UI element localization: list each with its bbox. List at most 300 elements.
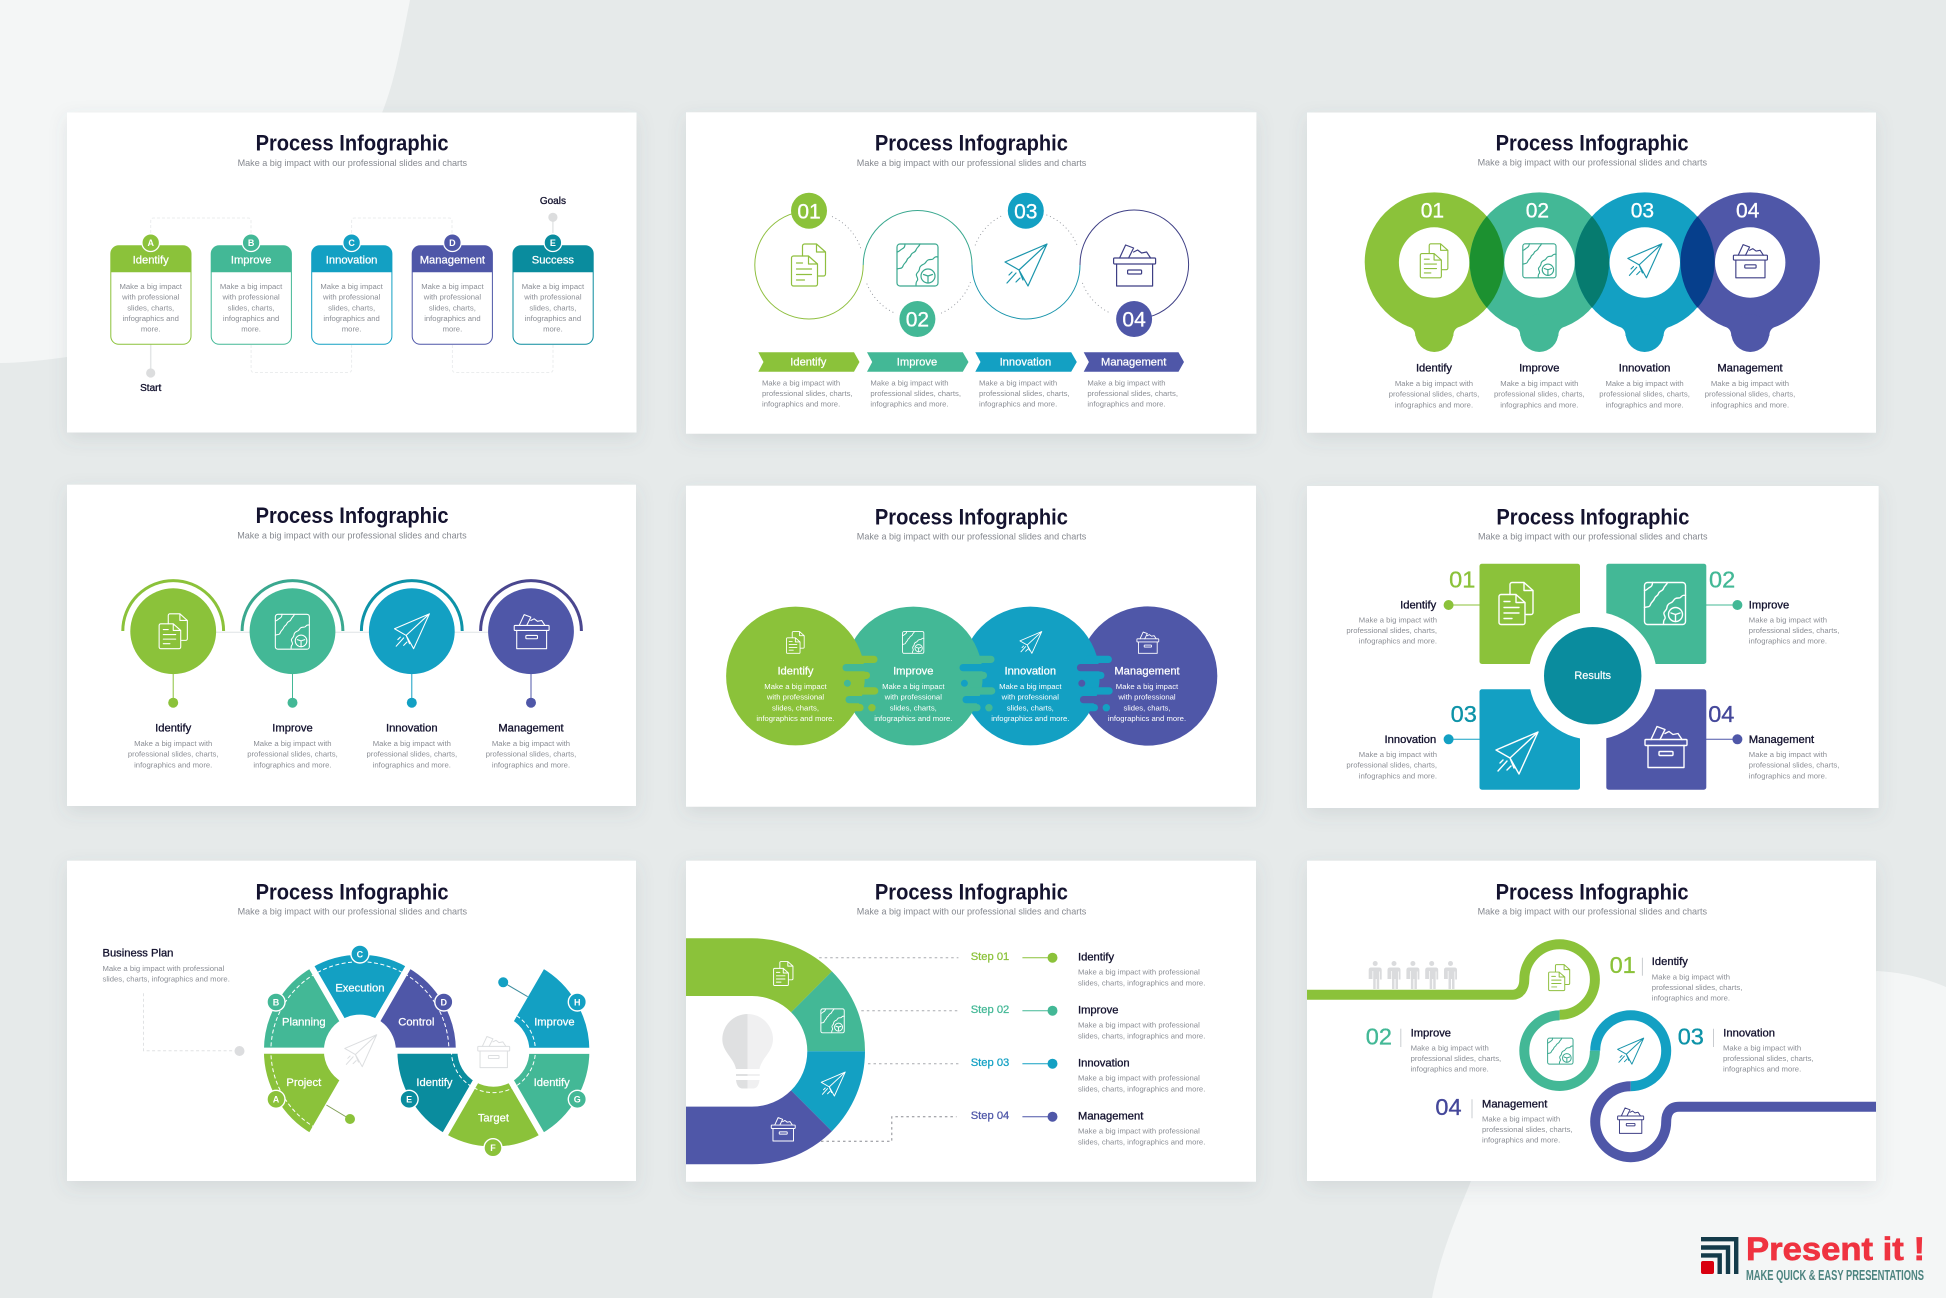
card: identify: slides, charts, bbox=[127, 303, 174, 312]
numbers bbox=[1449, 567, 1735, 727]
pin: 01 green bbox=[1365, 192, 1504, 352]
item 03: professional slides, charts, bbox=[1723, 1054, 1814, 1063]
step 4: management bbox=[481, 581, 581, 769]
step 03 row: Innovation bbox=[1078, 1057, 1130, 1069]
step 4: management: Make a big impact with bbox=[492, 739, 570, 748]
item 01: professional slides, charts, bbox=[1652, 983, 1742, 992]
interlock bars 1-2 bbox=[842, 656, 878, 711]
numbers: 02 bbox=[1709, 567, 1735, 593]
title: Process Infographic bbox=[256, 503, 449, 528]
text: management: slides, charts, bbox=[1124, 703, 1170, 712]
results circle: Results bbox=[1574, 670, 1612, 682]
text: identify: Identify bbox=[1400, 599, 1437, 611]
pin: 04 indigo bbox=[1681, 192, 1820, 352]
segment labels: Identify bbox=[534, 1077, 570, 1089]
text: management: infographics and more. bbox=[1749, 771, 1827, 780]
card: identify: with professional bbox=[121, 293, 180, 302]
badge 02 bbox=[899, 301, 935, 337]
numbers bbox=[1421, 200, 1760, 223]
slide background bbox=[1307, 112, 1876, 433]
item 03: Innovation bbox=[1723, 1027, 1775, 1039]
text: improve: Make a big impact with bbox=[1749, 615, 1827, 624]
card: identify: Identify bbox=[133, 255, 169, 267]
step: identify: Identify bbox=[790, 356, 827, 368]
text: management bbox=[1705, 363, 1795, 409]
item 04: infographics and more. bbox=[1482, 1136, 1560, 1145]
card: success: Make a big impact bbox=[522, 282, 585, 291]
quadrant 04 bbox=[1606, 689, 1706, 790]
card: success: slides, charts, bbox=[529, 303, 576, 312]
step: improve: infographics and more. bbox=[870, 400, 949, 409]
text: management: infographics and more. bbox=[1711, 400, 1789, 409]
goals marker: Goals bbox=[540, 196, 566, 207]
item 02: infographics and more. bbox=[1411, 1065, 1489, 1074]
business plan text: Business Plan bbox=[102, 947, 173, 959]
icon: box bbox=[1733, 245, 1767, 278]
business plan text: Make a big impact with professional bbox=[102, 964, 225, 973]
item 03: Make a big impact with bbox=[1723, 1043, 1801, 1052]
icon: map bbox=[1644, 582, 1686, 624]
step 02 row: Make a big impact with professional bbox=[1078, 1021, 1200, 1030]
item 02: 02 bbox=[1366, 1023, 1392, 1049]
step 2: improve bbox=[242, 581, 343, 769]
step: management: professional slides, charts, bbox=[1087, 389, 1178, 398]
card: management: infographics and bbox=[424, 314, 481, 323]
step 01 row: Step 01 bbox=[971, 951, 1009, 963]
step 02 row bbox=[971, 1004, 1205, 1040]
white cut-out ring bbox=[1529, 612, 1657, 740]
item 04: professional slides, charts, bbox=[1482, 1125, 1573, 1134]
item 04: Management bbox=[1482, 1098, 1548, 1110]
subtitle: Make a big impact with our professional slides and charts bbox=[857, 530, 1087, 541]
panel: horseshoe steps bbox=[686, 861, 1256, 1182]
text: management: Management bbox=[1749, 734, 1815, 746]
step 3: innovation: Innovation bbox=[386, 723, 438, 735]
item 03: infographics and more. bbox=[1723, 1065, 1801, 1074]
pin: 02 teal bbox=[1470, 192, 1609, 352]
text: identify: infographics and more. bbox=[1359, 637, 1437, 646]
item 01: 01 bbox=[1610, 952, 1636, 978]
logo wordmark: Present it ! bbox=[1746, 1231, 1925, 1267]
numbers: 01 bbox=[1421, 200, 1444, 223]
panel: S-shaped business plan bbox=[67, 861, 636, 1181]
text: innovation: Innovation bbox=[1619, 363, 1670, 375]
text: innovation: infographics and more. bbox=[1359, 771, 1437, 780]
text: innovation: Innovation bbox=[1004, 666, 1056, 678]
card: identify: Make a big impact bbox=[120, 282, 183, 291]
interlock bars 3-4 bbox=[1077, 656, 1113, 711]
icon: paper plane bbox=[1496, 732, 1538, 774]
card: improve: more. bbox=[241, 325, 261, 334]
slide background bbox=[686, 112, 1256, 434]
icon: box (faded) bbox=[478, 1037, 510, 1068]
subtitle: Make a big impact with our professional slides and charts bbox=[1478, 157, 1707, 168]
icon: box bbox=[1114, 245, 1156, 286]
dotted arcs bbox=[832, 215, 1111, 313]
card: innovation: infographics and bbox=[323, 314, 380, 323]
subtitle: Make a big impact with our professional slides and charts bbox=[857, 906, 1087, 917]
segment green bbox=[686, 938, 832, 1012]
step: identify bbox=[758, 352, 860, 409]
text: management: infographics and more. bbox=[1108, 714, 1186, 723]
text: identify bbox=[1346, 599, 1437, 646]
step: innovation: professional slides, charts, bbox=[979, 389, 1070, 398]
text: identify: infographics and more. bbox=[756, 714, 835, 723]
business plan text bbox=[102, 947, 230, 984]
card: management: slides, charts, bbox=[429, 303, 476, 312]
badge letters bbox=[273, 949, 581, 1153]
slide background bbox=[1307, 486, 1879, 808]
text: management: Make a big impact bbox=[1116, 682, 1179, 691]
step: innovation: Make a big impact with bbox=[979, 378, 1057, 387]
step: innovation bbox=[975, 352, 1077, 409]
step 2: improve: Improve bbox=[272, 723, 313, 735]
panel: wave outline process bbox=[686, 112, 1256, 434]
icon: box bbox=[771, 1118, 795, 1141]
badge letters: A bbox=[273, 1095, 280, 1105]
connecting line bbox=[173, 631, 531, 633]
item 02: professional slides, charts, bbox=[1411, 1054, 1501, 1063]
badge letters: G bbox=[574, 1095, 581, 1105]
icon: paper plane bbox=[1020, 632, 1042, 653]
step: identify: Make a big impact with bbox=[762, 378, 840, 387]
step 4: management: professional slides, charts, bbox=[486, 750, 576, 759]
numbers: 03 bbox=[1631, 200, 1654, 223]
step: improve: Make a big impact with bbox=[870, 378, 949, 387]
icon: box bbox=[1618, 1108, 1644, 1133]
subtitle: Make a big impact with our professional slides and charts bbox=[238, 905, 467, 916]
text: identify: Identify bbox=[777, 666, 814, 678]
badge 02: 02 bbox=[906, 309, 929, 332]
segment indigo bbox=[686, 1090, 832, 1164]
item 04: 04 bbox=[1435, 1094, 1462, 1120]
step 1: identify: infographics and more. bbox=[134, 760, 212, 769]
step 4: management: Management bbox=[498, 723, 565, 735]
text: identify: with professional bbox=[766, 693, 824, 702]
step: management: Management bbox=[1101, 356, 1167, 368]
step: management: infographics and more. bbox=[1087, 400, 1166, 409]
item 04: Make a big impact with bbox=[1482, 1114, 1560, 1123]
text: management: Management bbox=[1717, 363, 1784, 375]
item 01: Make a big impact with bbox=[1652, 972, 1730, 981]
item 01: infographics and more. bbox=[1652, 994, 1730, 1003]
quadrant 03 bbox=[1480, 689, 1580, 790]
text: improve: Make a big impact with bbox=[1500, 379, 1578, 388]
text: management: with professional bbox=[1117, 693, 1176, 702]
step 01 row: Identify bbox=[1078, 951, 1114, 963]
quadrant 02 bbox=[1606, 564, 1706, 664]
text: improve: Make a big impact bbox=[882, 682, 945, 691]
icon: light bulb bbox=[722, 1014, 773, 1088]
badge letters: D bbox=[441, 997, 448, 1007]
step: identify: infographics and more. bbox=[762, 400, 840, 409]
step: innovation: Innovation bbox=[1000, 356, 1051, 368]
icon: map bbox=[821, 1009, 844, 1033]
step 02 row: Step 02 bbox=[971, 1004, 1009, 1016]
subtitle: Make a big impact with our professional slides and charts bbox=[1478, 530, 1708, 541]
step 3: innovation: Make a big impact with bbox=[373, 739, 451, 748]
badge letters: F bbox=[490, 1143, 496, 1153]
slide background bbox=[67, 861, 636, 1181]
slide background bbox=[1307, 861, 1876, 1181]
step 2: improve: Make a big impact with bbox=[253, 739, 332, 748]
step 02 row: slides, charts, infographics and more. bbox=[1078, 1031, 1205, 1040]
title: Process Infographic bbox=[256, 131, 449, 156]
step 3: innovation bbox=[361, 581, 462, 769]
text: improve: with professional bbox=[884, 693, 942, 702]
badge letters: B bbox=[273, 997, 280, 1007]
step 03 row: slides, charts, infographics and more. bbox=[1078, 1084, 1205, 1093]
slide background bbox=[686, 486, 1256, 807]
text: management: Make a big impact with bbox=[1749, 750, 1827, 759]
card: management bbox=[412, 234, 492, 344]
segment labels: Improve bbox=[534, 1017, 575, 1029]
icon: document bbox=[792, 244, 826, 286]
card: improve: slides, charts, bbox=[228, 303, 275, 312]
text: identify: Make a big impact bbox=[764, 682, 828, 691]
start marker bbox=[140, 344, 161, 394]
goals marker bbox=[540, 196, 566, 233]
item 02: Improve bbox=[1411, 1027, 1451, 1039]
icon: document bbox=[1420, 244, 1448, 278]
segment labels: Control bbox=[398, 1017, 434, 1029]
icon: paper plane bbox=[1628, 244, 1662, 278]
step 01 row: Make a big impact with professional bbox=[1078, 968, 1200, 977]
text: improve: Improve bbox=[1519, 363, 1560, 375]
segment labels: Planning bbox=[282, 1017, 326, 1029]
card: success: Success bbox=[532, 255, 574, 267]
card: identify bbox=[111, 234, 191, 344]
title: Process Infographic bbox=[875, 879, 1068, 904]
segments bbox=[261, 952, 592, 1150]
step 04 row: Step 04 bbox=[971, 1110, 1009, 1122]
text: management bbox=[1749, 734, 1839, 780]
text: identify: Identify bbox=[1416, 363, 1452, 375]
icon: map bbox=[275, 614, 309, 649]
icon: plane (faded) bbox=[345, 1035, 377, 1067]
card: innovation: slides, charts, bbox=[328, 303, 375, 312]
icon: map bbox=[1548, 1038, 1573, 1064]
circles bbox=[726, 606, 1217, 746]
card: identify: A bbox=[147, 238, 154, 248]
icon: paper plane bbox=[395, 614, 429, 649]
icon: document bbox=[1549, 965, 1570, 991]
text: innovation: Make a big impact bbox=[999, 682, 1062, 691]
item 04 bbox=[1435, 1094, 1573, 1145]
text: identify bbox=[1389, 363, 1479, 409]
text: improve: Improve bbox=[1749, 599, 1789, 611]
segment teal bbox=[791, 971, 865, 1051]
text: management: Management bbox=[1114, 666, 1181, 678]
segment labels: Project bbox=[286, 1077, 322, 1089]
numbers: 02 bbox=[1526, 200, 1549, 223]
step 1: identify bbox=[123, 581, 224, 769]
step: improve bbox=[867, 352, 968, 409]
card: success: infographics and bbox=[525, 314, 581, 323]
subtitle: Make a big impact with our professional slides and charts bbox=[238, 157, 467, 168]
interlock bars 2-3 bbox=[960, 656, 995, 711]
card: innovation: Make a big impact bbox=[320, 282, 384, 291]
white dashed path bbox=[271, 962, 535, 1128]
badge 03: 03 bbox=[1014, 200, 1037, 223]
text: innovation: infographics and more. bbox=[1605, 400, 1684, 409]
item 01: Identify bbox=[1652, 956, 1688, 968]
logo mark bbox=[1701, 1239, 1736, 1274]
badge 01: 01 bbox=[797, 200, 821, 223]
badge 03 bbox=[1008, 193, 1044, 229]
step 01 row bbox=[971, 951, 1205, 987]
icon: map bbox=[897, 244, 938, 286]
card: success: E bbox=[550, 238, 556, 248]
card: innovation: with professional bbox=[322, 293, 381, 302]
text: improve bbox=[1494, 363, 1585, 409]
text: improve: infographics and more. bbox=[874, 714, 952, 723]
step 04 row: Management bbox=[1078, 1110, 1144, 1122]
text: innovation: Innovation bbox=[1385, 734, 1436, 746]
step 02 row: Improve bbox=[1078, 1004, 1118, 1016]
step 1: identify: Identify bbox=[155, 723, 192, 735]
dashed connectors bbox=[151, 218, 553, 372]
text: improve: infographics and more. bbox=[1500, 400, 1578, 409]
step 3: innovation: infographics and more. bbox=[373, 760, 451, 769]
text: improve bbox=[874, 666, 952, 723]
badge letters: C bbox=[357, 949, 364, 959]
icon: box bbox=[1137, 632, 1159, 653]
card: improve: Improve bbox=[231, 255, 271, 267]
badge 01 bbox=[791, 193, 827, 229]
step: management bbox=[1084, 352, 1184, 409]
title: Process Infographic bbox=[1496, 504, 1689, 529]
card: innovation: Innovation bbox=[326, 255, 377, 267]
step 04 row bbox=[971, 1110, 1205, 1146]
segment labels: Execution bbox=[335, 983, 384, 995]
subtitle: Make a big impact with our professional slides and charts bbox=[1478, 905, 1707, 916]
card: management: more. bbox=[443, 325, 462, 334]
card: improve: with professional bbox=[221, 293, 280, 302]
step 03 row: Step 03 bbox=[971, 1057, 1009, 1069]
card: innovation: C bbox=[348, 238, 355, 248]
text: innovation bbox=[991, 666, 1069, 723]
segment labels: Target bbox=[478, 1112, 510, 1124]
card: success: with professional bbox=[523, 293, 582, 302]
icon: box bbox=[1645, 726, 1687, 768]
segment blue bbox=[791, 1051, 865, 1131]
step 2: improve: professional slides, charts, bbox=[247, 750, 338, 759]
text: improve bbox=[1749, 599, 1839, 646]
logo: Present it bbox=[1701, 1231, 1925, 1284]
panel: overlapping pins bbox=[1307, 112, 1876, 433]
icon: document bbox=[774, 962, 793, 986]
text: identify: Make a big impact with bbox=[1359, 615, 1437, 624]
text: improve: slides, charts, bbox=[890, 703, 937, 712]
connector stems bbox=[1449, 605, 1737, 739]
badge letters: H bbox=[574, 997, 581, 1007]
text: innovation bbox=[1346, 734, 1437, 780]
card: improve bbox=[211, 234, 291, 344]
numbers: 04 bbox=[1736, 200, 1760, 223]
text: identify: slides, charts, bbox=[772, 703, 819, 712]
text: identify: professional slides, charts, bbox=[1346, 626, 1437, 635]
dashed connector bbox=[144, 993, 244, 1056]
icon: map bbox=[1523, 244, 1556, 278]
numbers: 01 bbox=[1449, 567, 1475, 593]
step 04 row: slides, charts, infographics and more. bbox=[1078, 1137, 1205, 1146]
card: innovation: more. bbox=[342, 325, 361, 334]
letter badges bbox=[267, 945, 586, 1157]
text: innovation: infographics and more. bbox=[991, 714, 1069, 723]
card: management: Make a big impact bbox=[421, 282, 484, 291]
results circle bbox=[1544, 627, 1641, 724]
item 01 bbox=[1610, 952, 1742, 1003]
icon: paper plane bbox=[1005, 244, 1047, 286]
text: management: Make a big impact with bbox=[1711, 379, 1789, 388]
panel: card process bbox=[67, 112, 636, 432]
card: management: Management bbox=[420, 255, 486, 267]
text: innovation: professional slides, charts, bbox=[1346, 761, 1437, 770]
badge 04 bbox=[1116, 301, 1152, 337]
numbers: 03 bbox=[1451, 701, 1477, 727]
segment labels: Identify bbox=[416, 1077, 453, 1089]
inner white circles bbox=[1399, 227, 1785, 298]
text: innovation: Make a big impact with bbox=[1605, 379, 1684, 388]
step: improve: Improve bbox=[897, 356, 937, 368]
step: identify: professional slides, charts, bbox=[762, 389, 853, 398]
step: improve: professional slides, charts, bbox=[870, 389, 961, 398]
text: management: professional slides, charts, bbox=[1749, 761, 1839, 770]
card: identify: more. bbox=[141, 325, 161, 334]
icon: paper plane bbox=[821, 1072, 845, 1096]
title: Process Infographic bbox=[1496, 130, 1689, 155]
panel: circles with arcs bbox=[67, 485, 636, 806]
title: Process Infographic bbox=[875, 504, 1068, 529]
numbers: 04 bbox=[1708, 701, 1734, 727]
card: success bbox=[513, 234, 593, 344]
wave line bbox=[755, 210, 1189, 319]
dashed leader lines bbox=[819, 958, 958, 1141]
title: Process Infographic bbox=[1496, 879, 1689, 904]
panel: interlocking circles bbox=[686, 486, 1256, 807]
badge letters: E bbox=[406, 1095, 412, 1105]
panel: winding road bbox=[1307, 861, 1876, 1181]
icon: box bbox=[514, 615, 549, 649]
step 03 row: Make a big impact with professional bbox=[1078, 1074, 1200, 1083]
card: improve: infographics and bbox=[223, 314, 279, 323]
slide background bbox=[67, 485, 636, 806]
road bbox=[1307, 944, 1876, 1157]
slide background bbox=[686, 861, 1256, 1182]
green end pin bbox=[326, 1105, 355, 1124]
icon: document bbox=[787, 632, 804, 653]
subtitle: Make a big impact with our professional slides and charts bbox=[237, 529, 467, 540]
text: identify: Make a big impact with bbox=[1395, 379, 1473, 388]
title: Process Infographic bbox=[256, 879, 449, 904]
text: improve: professional slides, charts, bbox=[1749, 626, 1839, 635]
item 03: 03 bbox=[1678, 1023, 1704, 1049]
icon: paper plane bbox=[1618, 1038, 1644, 1064]
step 04 row: Make a big impact with professional bbox=[1078, 1127, 1200, 1136]
icon: document bbox=[159, 614, 187, 649]
step 3: innovation: professional slides, charts, bbox=[367, 750, 457, 759]
background blob top left bbox=[0, 0, 410, 363]
slide background bbox=[67, 112, 636, 432]
item 03 bbox=[1678, 1023, 1814, 1074]
business plan text: slides, charts, infographics and more. bbox=[102, 975, 230, 984]
blue end pin bbox=[498, 977, 528, 997]
card: innovation bbox=[312, 234, 392, 344]
text: innovation: Make a big impact with bbox=[1359, 750, 1437, 759]
text: identify: professional slides, charts, bbox=[1389, 390, 1479, 399]
panel: results quadrant bbox=[1307, 486, 1879, 808]
